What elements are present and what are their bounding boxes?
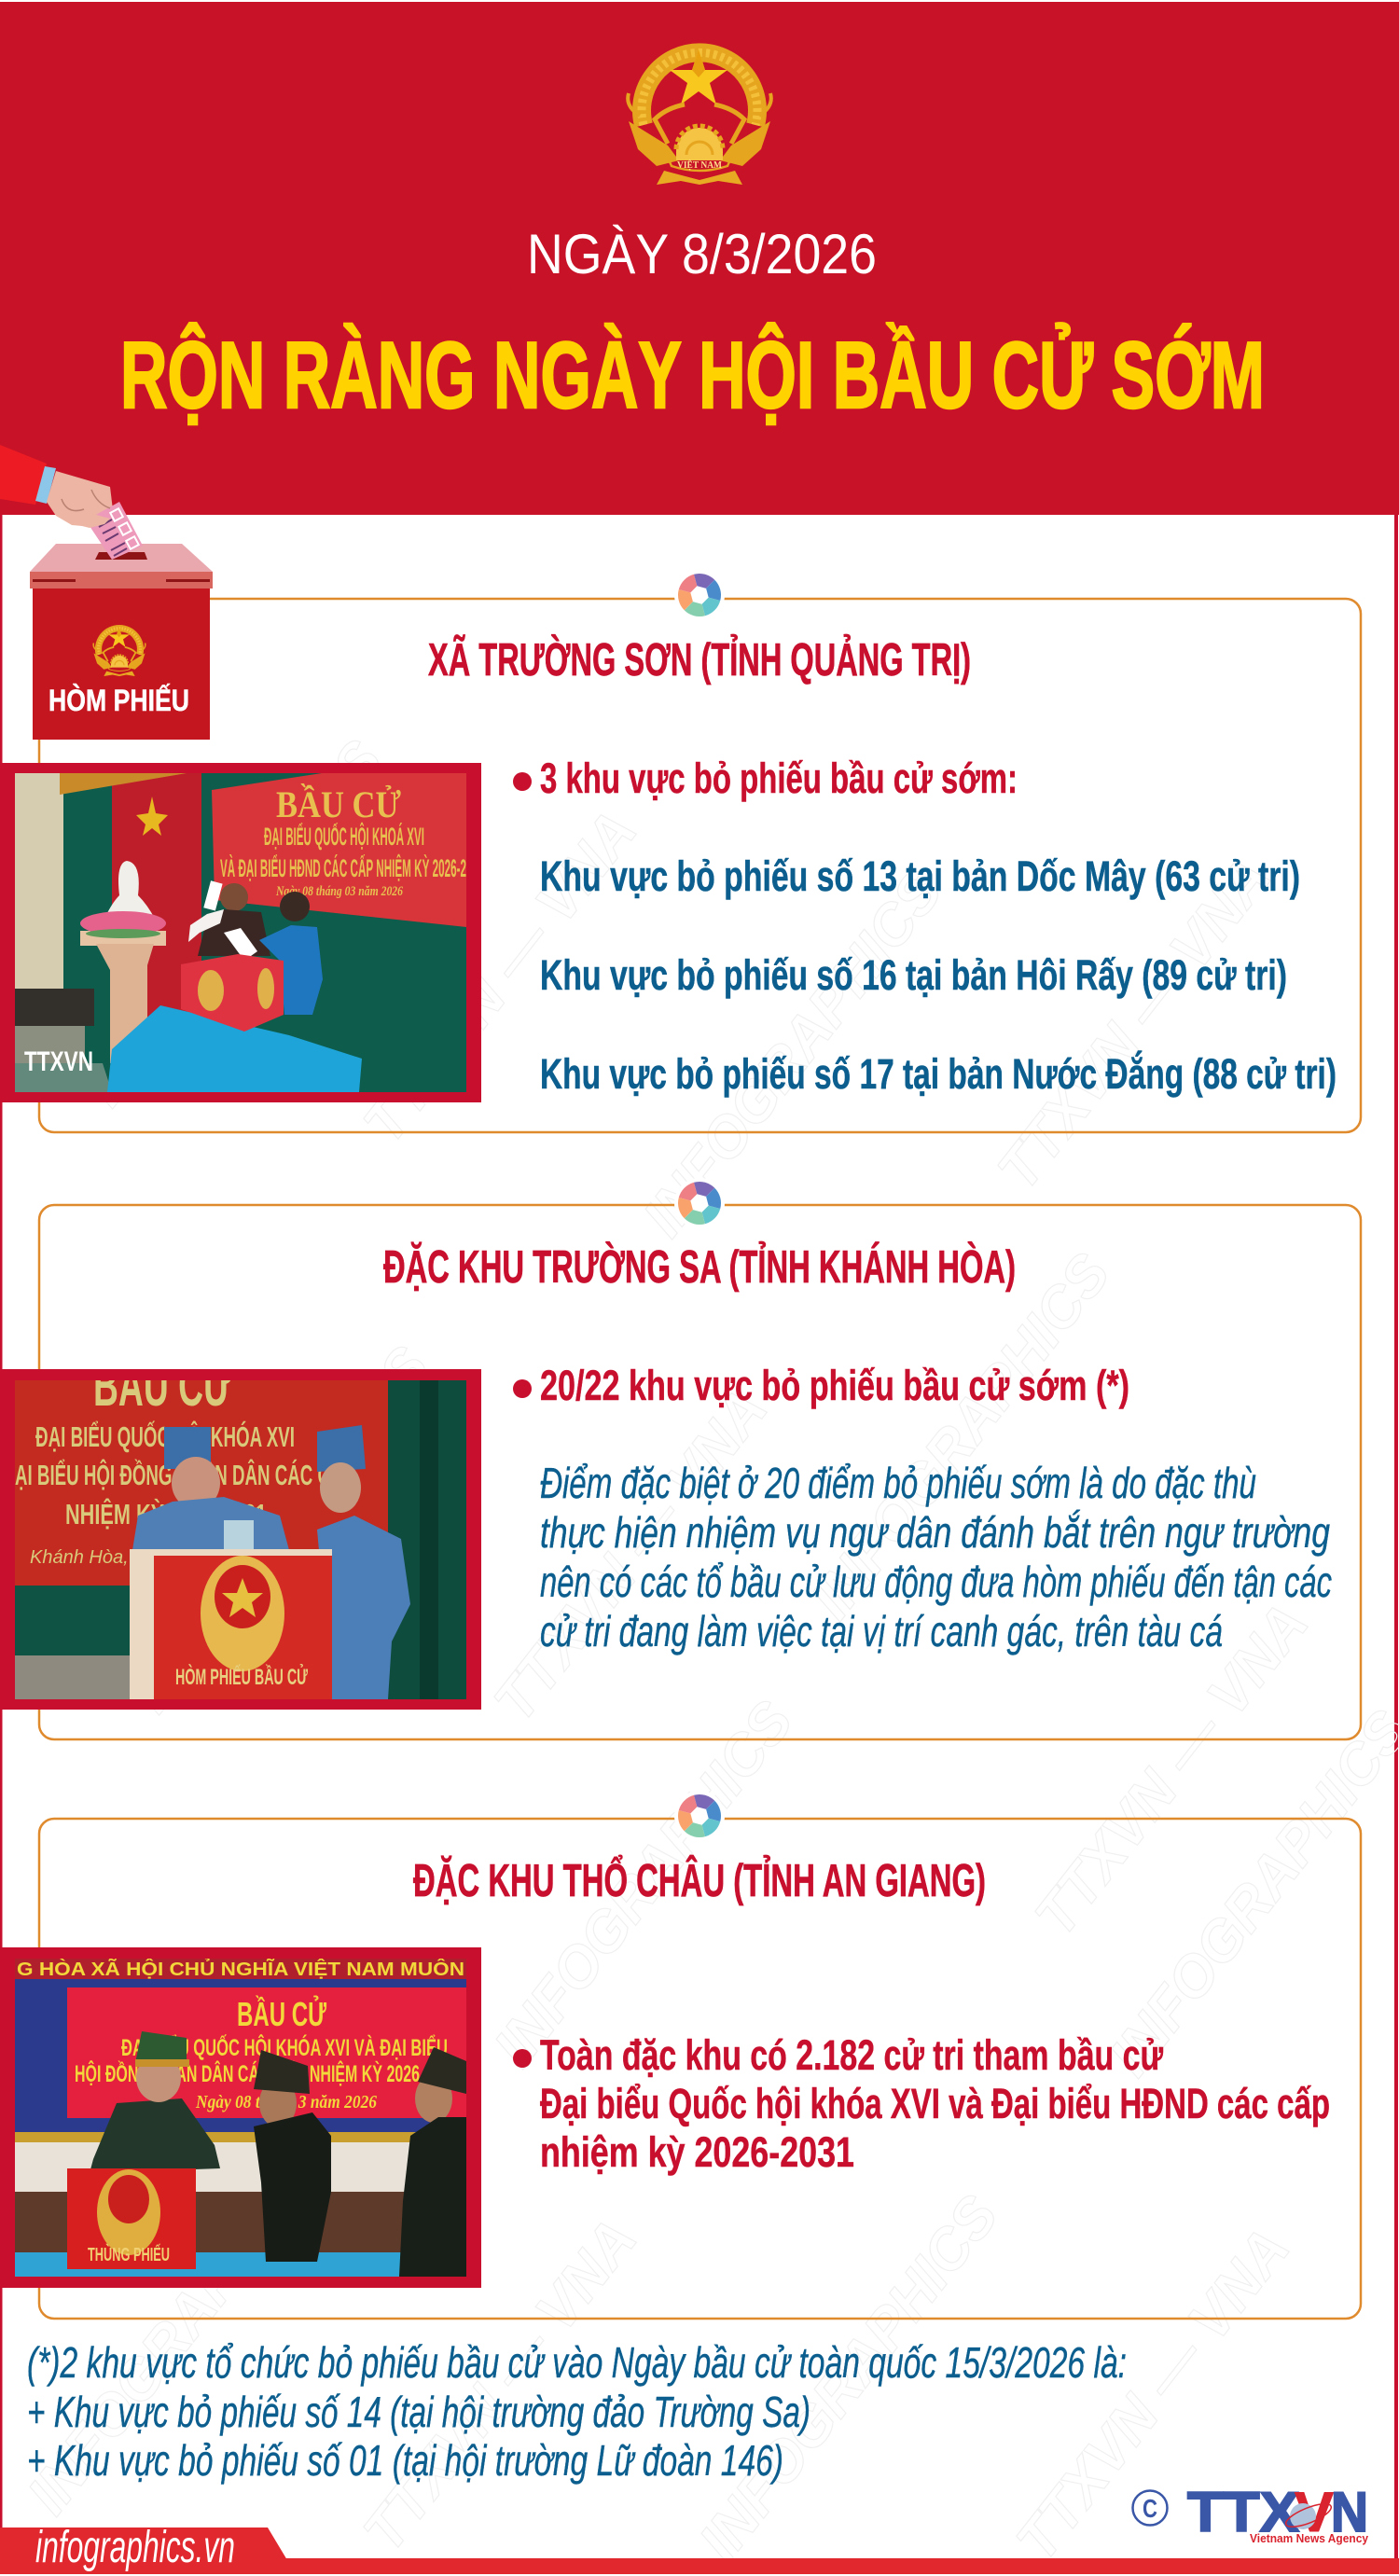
icon: aperture	[673, 1790, 726, 1842]
watermarks: INFOGRAPHICS	[482, 1690, 806, 2079]
watermarks: TTXVN — VNA	[482, 1378, 780, 1734]
photo: navy officers voting: ĐẠI BIỂU QUỐC HỘI KHÓA XVI	[35, 1420, 295, 1453]
bullet	[513, 1379, 532, 1398]
photo: navy officers voting: ẠI BIỂU HỘI ĐỒNG NHÂN DÂN CÁC CẤP	[15, 1458, 354, 1491]
footnote: + Khu vực bỏ phiếu số 01 (tại hội trường Lữ đoàn 146)	[27, 2436, 783, 2485]
photo: voters at Trường Sơn	[0, 763, 481, 1102]
footnote	[27, 2338, 1127, 2485]
logo: TTXVN	[1132, 2481, 1369, 2545]
watermarks: INFOGRAPHICS	[72, 729, 395, 1118]
header band	[0, 2, 1399, 515]
bullet	[513, 772, 532, 791]
photo: voters at Trường Sơn: TTXVN	[24, 1046, 93, 1077]
heading: Thổ Châu: ĐẶC KHU THỔ CHÂU (TỈNH AN GIANG)	[413, 1855, 986, 1906]
watermarks: TTXVN — VNA	[1004, 2217, 1302, 2573]
logo: TTXVN: C	[1143, 2494, 1157, 2523]
icon: aperture	[673, 1177, 726, 1229]
watermarks: TTXVN — VNA	[352, 799, 649, 1156]
panel: Thổ Châu	[39, 1790, 1361, 2319]
footer bar and site tag	[0, 2523, 1399, 2574]
photo: navy officers voting: NHIỆM KỲ 2026-2031	[65, 1497, 267, 1530]
text block: Thổ Châu	[513, 2031, 1330, 2176]
text block: Thổ Châu: nhiệm kỳ 2026-2031	[540, 2128, 854, 2176]
site name: infographics.vn	[35, 2523, 235, 2572]
photo: soldiers voting: Ngày 08 tháng 3 năm 2026	[195, 2092, 377, 2112]
text block: Trường Sơn	[513, 755, 1337, 1098]
icon: national emblem	[628, 49, 771, 185]
icon: hand and ballot box	[0, 445, 213, 740]
photo: navy officers voting: HÒM PHIẾU BẦU CỬ	[175, 1663, 308, 1690]
date line: NGÀY 8/3/2026	[527, 223, 877, 285]
icon: small emblem	[93, 627, 145, 676]
watermarks: INFOGRAPHICS	[799, 1242, 1123, 1631]
photo: soldiers voting: THÙNG PHIẾU	[88, 2243, 170, 2265]
panel: Xã Trường Sơn	[39, 569, 1361, 1132]
icon: national emblem: VIỆT NAM	[677, 159, 723, 171]
photo: soldiers voting: ĐẠI BIỂU QUỐC HỘI KHÓA XVI VÀ ĐẠI BIỂU	[121, 2033, 448, 2061]
watermarks: INFOGRAPHICS	[16, 2138, 339, 2527]
watermarks: TTXVN — VNA	[1023, 1592, 1321, 1948]
bullet	[513, 2049, 532, 2068]
logo: TTXVN: V	[1295, 2481, 1334, 2543]
photo: soldiers voting: G HÒA XÃ HỘI CHỦ NGHĨA VIỆT NAM MUÔN	[17, 1958, 464, 1980]
text block: Trường Sơn: 3 khu vực bỏ phiếu bầu cử sớm:	[540, 755, 1018, 802]
heading: Xã Trường Sơn: XÃ TRƯỜNG SƠN (TỈNH QUẢNG TRỊ)	[428, 634, 971, 686]
photo: navy officers voting: BẦU CỬ	[93, 1354, 232, 1419]
label: ballot box: HÒM PHIẾU	[48, 684, 189, 717]
photo: voters at Trường Sơn: BẦU CỬ	[276, 783, 401, 825]
icon: aperture	[673, 569, 726, 621]
photo: soldiers voting: HỘI ĐỒNG NHÂN DÂN CÁC CẤP NHIỆM KỲ 2026	[75, 2059, 420, 2087]
panel: Trường Sa	[39, 1177, 1361, 1739]
footnote: + Khu vực bỏ phiếu số 14 (tại hội trường đảo Trường Sa)	[27, 2388, 810, 2436]
watermarks	[16, 729, 1399, 2573]
watermarks: INFOGRAPHICS	[118, 1336, 442, 1724]
logo: TTXVN: TTX	[1187, 2481, 1299, 2543]
watermarks: INFOGRAPHICS	[687, 2184, 1011, 2573]
photo: navy officers voting	[0, 1354, 481, 1710]
watermarks: TTXVN — VNA	[986, 846, 1283, 1202]
photo: voters at Trường Sơn: Ngày 08 tháng 03 năm 2026	[275, 884, 403, 899]
photo: navy officers voting: Khánh Hòa, n	[30, 1547, 144, 1568]
logo: TTXVN: Vietnam News Agency	[1250, 2531, 1369, 2545]
text block: Thổ Châu: Toàn đặc khu có 2.182 cử tri tham bầu cử	[540, 2031, 1163, 2079]
photo: soldiers voting	[0, 1947, 481, 2288]
logo: TTXVN: N	[1331, 2481, 1368, 2543]
watermarks: INFOGRAPHICS	[631, 860, 955, 1249]
watermarks: TTXVN — VNA	[352, 2208, 649, 2564]
heading: Trường Sa: ĐẶC KHU TRƯỜNG SA (TỈNH KHÁNH HÒA)	[383, 1241, 1016, 1293]
text block: Trường Sa: 20/22 khu vực bỏ phiếu bầu cử sớm (*)	[540, 1362, 1129, 1409]
photo: soldiers voting: BẦU CỬ	[237, 1994, 326, 2033]
text: VÀ ĐẠI BIỂU HĐND CÁC CẤP NHIỆM KỲ 2026-2	[220, 853, 466, 882]
photo: voters at Trường Sơn: ĐẠI BIỂU QUỐC HỘI KHOÁ XVI	[264, 821, 424, 851]
text block: Trường Sa	[513, 1362, 1332, 1655]
